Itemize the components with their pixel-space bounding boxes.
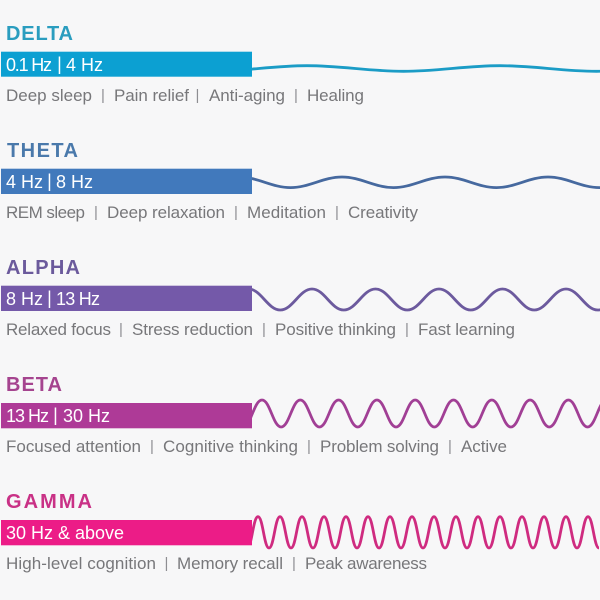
frequency bar: theta: | xyxy=(47,171,52,191)
frequency bar: delta xyxy=(1,52,252,77)
frequency bar: theta xyxy=(1,169,252,194)
frequency bar: alpha xyxy=(1,286,252,311)
heading: beta: BETA xyxy=(6,374,62,396)
benefits text: gamma: Memory recall xyxy=(177,554,283,573)
benefits text: beta: | xyxy=(150,438,154,455)
frequency bar: alpha: 8 Hz xyxy=(6,289,43,309)
benefits text: alpha: Stress reduction xyxy=(132,320,253,339)
benefits text: gamma: High-level cognition xyxy=(6,554,156,573)
benefits text: beta: Cognitive thinking xyxy=(163,437,298,456)
wave: beta xyxy=(243,400,600,427)
benefits text: delta: | xyxy=(196,87,199,104)
benefits text: theta: REM sleep xyxy=(6,203,85,222)
heading: theta: THETA xyxy=(7,140,78,162)
wave: gamma xyxy=(247,517,599,548)
benefits text: gamma xyxy=(6,554,427,573)
panel: theta band xyxy=(1,140,600,222)
benefits text: alpha xyxy=(6,320,515,339)
panel: alpha band xyxy=(1,257,600,339)
benefits text: theta xyxy=(6,203,418,222)
frequency bar: theta: 8 Hz xyxy=(56,172,93,192)
frequency bar: gamma xyxy=(1,520,252,545)
benefits text: delta: Anti-aging xyxy=(209,86,285,105)
heading: delta: DELTA xyxy=(6,23,73,45)
frequency bar: gamma: 30 Hz & above xyxy=(6,523,124,543)
benefits text: delta xyxy=(6,86,364,105)
benefits text: alpha: | xyxy=(262,321,266,338)
heading: alpha: ALPHA xyxy=(6,257,80,279)
benefits text: delta: | xyxy=(294,87,298,104)
frequency bar: delta: 0.1 Hz xyxy=(6,55,52,75)
benefits text: gamma: | xyxy=(292,555,296,572)
benefits text: gamma: | xyxy=(165,555,168,572)
benefits text: alpha: | xyxy=(405,321,409,338)
benefits text: beta: | xyxy=(307,438,311,455)
benefits text: gamma: Peak awareness xyxy=(305,554,427,573)
frequency bar: beta: | xyxy=(53,405,58,425)
benefits text: alpha: | xyxy=(119,321,123,338)
benefits text: delta: Deep sleep xyxy=(6,86,92,105)
frequency bar: beta xyxy=(1,403,252,428)
benefits text: theta: | xyxy=(234,204,238,221)
benefits text: alpha: Fast learning xyxy=(418,320,515,339)
panel: beta band xyxy=(1,374,600,456)
benefits text: beta: | xyxy=(448,438,452,455)
benefits text: theta: | xyxy=(94,204,98,221)
frequency bar: beta: 30 Hz xyxy=(63,406,110,426)
benefits text: delta: Healing xyxy=(307,86,364,105)
benefits text: theta: Creativity xyxy=(348,203,418,222)
benefits text: delta: Pain relief xyxy=(114,86,189,105)
benefits text: beta: Problem solving xyxy=(320,437,439,456)
frequency bar: alpha: | xyxy=(47,288,52,308)
benefits text: delta: | xyxy=(101,87,105,104)
benefits text: beta xyxy=(6,437,507,456)
frequency bar: beta: 13 Hz xyxy=(6,406,49,426)
frequency bar: delta: 4 Hz xyxy=(66,55,103,75)
wave: theta xyxy=(239,177,600,188)
benefits text: beta: Focused attention xyxy=(6,437,141,456)
benefits text: theta: | xyxy=(335,204,339,221)
benefits text: alpha: Positive thinking xyxy=(275,320,396,339)
wave: alpha xyxy=(248,289,600,310)
heading: gamma: GAMMA xyxy=(6,491,92,513)
frequency bar: alpha: 13 Hz xyxy=(56,289,100,309)
wave: delta xyxy=(210,66,600,71)
frequency bar: delta: | xyxy=(57,54,62,74)
frequency bar: theta: 4 Hz xyxy=(6,172,43,192)
panel: delta band xyxy=(1,23,600,105)
benefits text: theta: Meditation xyxy=(247,203,326,222)
benefits text: theta: Deep relaxation xyxy=(107,203,225,222)
benefits text: beta: Active xyxy=(461,437,507,456)
benefits text: alpha: Relaxed focus xyxy=(6,320,111,339)
panel: gamma band xyxy=(1,491,599,573)
